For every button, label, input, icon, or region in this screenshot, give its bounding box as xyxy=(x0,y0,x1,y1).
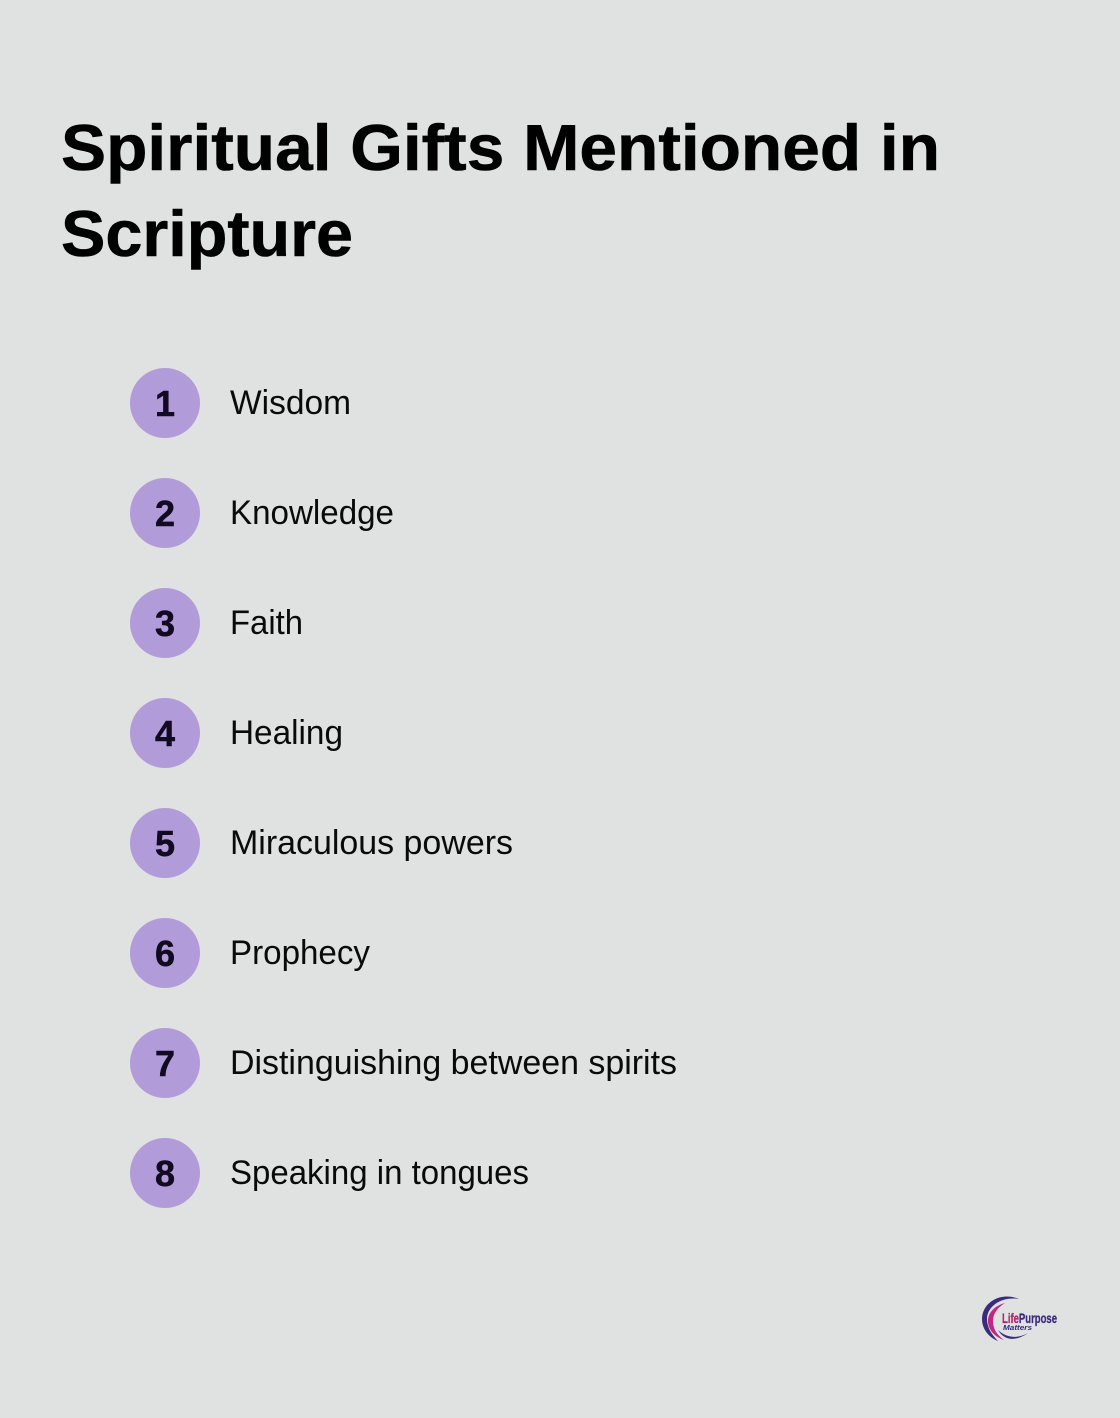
title xyxy=(61,111,940,270)
list item 3: Faith: Faith xyxy=(230,604,303,642)
list item 5: Miraculous powers: 5 xyxy=(155,823,175,864)
list item 6: Prophecy: Prophecy xyxy=(230,934,370,972)
list item 8: Speaking in tongues: Speaking in tongues xyxy=(230,1154,529,1192)
list item 1: Wisdom: Wisdom xyxy=(230,384,351,422)
list item 7: Distinguishing between spirits: 7 xyxy=(155,1043,175,1084)
list item 2: Knowledge: Knowledge xyxy=(230,494,394,532)
logo: Life Purpose Matters xyxy=(982,1296,1057,1341)
list item 6: Prophecy xyxy=(130,918,370,988)
logo: Life Purpose Matters: Matters xyxy=(1003,1325,1032,1332)
list item 1: Wisdom: 1 xyxy=(155,383,175,424)
list item 2: Knowledge: 2 xyxy=(155,493,175,534)
list item 8: Speaking in tongues xyxy=(130,1138,529,1208)
list item 3: Faith xyxy=(130,588,303,658)
list item 5: Miraculous powers xyxy=(130,808,513,878)
logo: Life Purpose Matters: LifePurpose xyxy=(1002,1310,1057,1326)
list item 1: Wisdom xyxy=(130,368,351,438)
list item 4: Healing xyxy=(130,698,343,768)
title: Spiritual Gifts Mentioned in xyxy=(61,111,940,184)
list item 4: Healing: 4 xyxy=(155,713,175,754)
list item 2: Knowledge xyxy=(130,478,394,548)
title: Scripture xyxy=(61,197,353,270)
list item 8: Speaking in tongues: 8 xyxy=(155,1153,175,1194)
list item 3: Faith: 3 xyxy=(155,603,175,644)
list item 7: Distinguishing between spirits xyxy=(130,1028,677,1098)
list item 4: Healing: Healing xyxy=(230,714,343,752)
list item 5: Miraculous powers: Miraculous powers xyxy=(230,824,513,862)
list item 7: Distinguishing between spirits: Distinguishing between spirits xyxy=(230,1044,677,1082)
list item 6: Prophecy: 6 xyxy=(155,933,175,974)
